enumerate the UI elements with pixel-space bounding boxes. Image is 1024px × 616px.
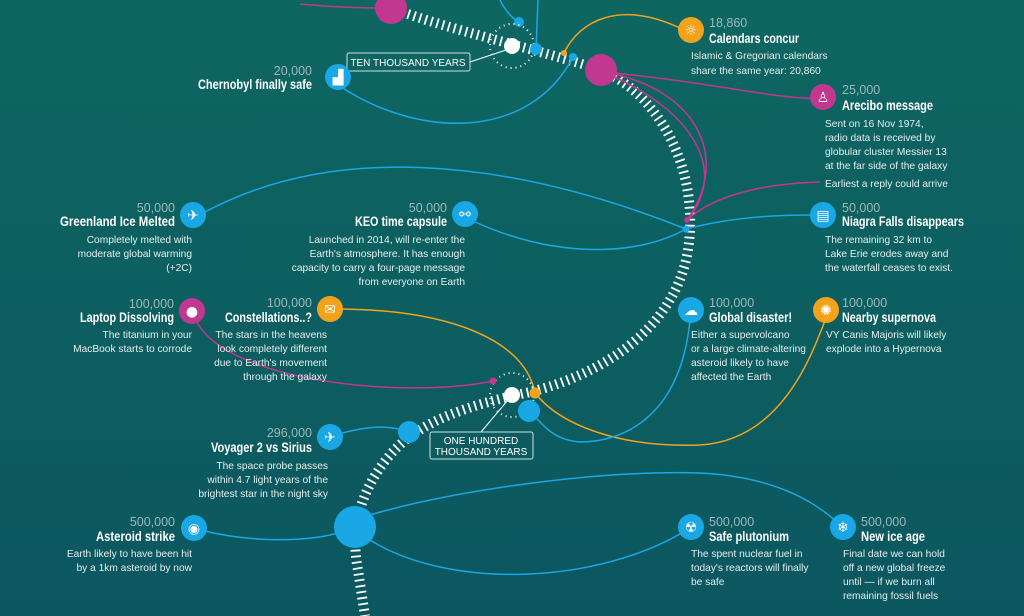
item: New ice age: until — if we burn all [843, 577, 935, 588]
item: Greenland: ✈ [187, 208, 199, 224]
item: Niagara: the waterfall ceases to exist. [825, 263, 953, 274]
item: Greenland [60, 201, 206, 274]
item: KEO: Earth's atmosphere. It has enough [310, 249, 465, 260]
item: Asteroid: 500,000 [130, 515, 175, 529]
item: Calendars concur: Islamic & Gregorian calendars [691, 51, 827, 62]
item: Laptop: ● [186, 304, 198, 320]
connector lines [195, 0, 842, 574]
item: KEO: Launched in 2014, will re-enter the [309, 235, 465, 246]
item: Safe plutonium: be safe [691, 577, 725, 588]
item: Arecibo: at the far side of the galaxy [825, 161, 948, 172]
item: Constellations: The stars in the heavens [215, 330, 327, 341]
item: Nearby supernova: VY Canis Majoris will likely [826, 330, 947, 341]
item: Global disaster [678, 296, 806, 383]
item: Greenland: Greenland Ice Melted [60, 213, 175, 229]
item: Arecibo: Earliest a reply could arrive [825, 179, 948, 190]
item: Arecibo: globular cluster Messier 13 [825, 147, 947, 158]
item: Greenland: (+2C) [166, 263, 192, 274]
item: Arecibo: radio data is received by [825, 133, 936, 144]
label: one hundred thousand years: THOUSAND YEARS [435, 447, 528, 458]
item: Calendars concur: 18,860 [709, 16, 747, 30]
item: Arecibo: Arecibo message [842, 97, 933, 113]
item: Laptop [73, 297, 205, 355]
item: Calendars concur: ☼ [685, 23, 697, 39]
item: KEO: 50,000 [409, 201, 447, 215]
item: KEO [292, 201, 478, 288]
item: Safe plutonium: today's reactors will finally [691, 563, 809, 574]
item: Arecibo: Sent on 16 Nov 1974, [825, 119, 924, 130]
item: Nearby supernova: ✺ [820, 303, 832, 319]
item: New ice age: 500,000 [861, 515, 906, 529]
item: Calendars concur: Calendars concur [709, 30, 799, 46]
item: Global disaster: asteroid likely to have [691, 358, 789, 369]
item: Constellations: through the galaxy [243, 372, 328, 383]
item: New ice age: New ice age [861, 528, 925, 544]
item: Safe plutonium: 500,000 [709, 515, 754, 529]
item: New ice age: ❄ [837, 520, 849, 536]
item: Constellations: 100,000 [267, 296, 312, 310]
item: Nearby supernova: 100,000 [842, 296, 887, 310]
item: Niagara [810, 201, 964, 274]
item: Asteroid: ◉ [188, 521, 200, 537]
label: ten thousand years: TEN THOUSAND YEARS [350, 58, 466, 69]
item: Voyager: within 4.7 light years of the [206, 475, 328, 486]
item: Voyager: Voyager 2 vs Sirius [211, 439, 312, 455]
item: Niagara: Niagra Falls disappears [842, 213, 964, 229]
label: one hundred thousand years: ONE HUNDRED [444, 436, 518, 447]
item: Arecibo [810, 83, 948, 190]
item: Calendars concur: share the same year: 20,860 [691, 66, 821, 77]
item: Safe plutonium: Safe plutonium [709, 528, 789, 544]
item: Asteroid [67, 515, 207, 574]
item: Greenland: moderate global warming [78, 249, 192, 260]
item: Global disaster: 100,000 [709, 296, 754, 310]
item: Laptop: 100,000 [129, 297, 174, 311]
item: Laptop: The titanium in your [103, 330, 193, 341]
item: Constellations: Constellations..? [225, 309, 312, 325]
item: Calendars concur [678, 16, 827, 77]
item: Arecibo: ♙ [817, 90, 829, 106]
item: Voyager: brightest star in the night sky [198, 489, 329, 500]
item: Constellations: ✉ [324, 302, 336, 318]
item: Greenland: 50,000 [137, 201, 175, 215]
item: Niagara: 50,000 [842, 201, 880, 215]
item: New ice age: Final date we can hold [843, 549, 945, 560]
label: one hundred thousand years [430, 400, 533, 459]
item: Greenland: Completely melted with [87, 235, 192, 246]
item: Voyager: 296,000 [267, 426, 312, 440]
item: Voyager: ✈ [324, 430, 336, 446]
item: Voyager [198, 424, 343, 500]
item: Global disaster: Either a supervolcano [691, 330, 790, 341]
item: New ice age: off a new global freeze [843, 563, 946, 574]
item: Chernobyl: 20,000 [274, 64, 312, 78]
item: Laptop: MacBook starts to corrode [73, 344, 192, 355]
item: KEO: from everyone on Earth [359, 277, 465, 288]
item: Global disaster: ☁ [684, 303, 698, 319]
timeline spine [355, 8, 690, 616]
item: Safe plutonium [678, 514, 809, 588]
item: Chernobyl: Chernobyl finally safe [198, 76, 312, 92]
item: Chernobyl [198, 64, 351, 92]
item: Asteroid: Earth likely to have been hit [67, 549, 192, 560]
item: Global disaster: affected the Earth [691, 372, 771, 383]
item: KEO: capacity to carry a four-page message [292, 263, 465, 274]
item: New ice age: remaining fossil fuels [843, 591, 938, 602]
item: Safe plutonium: The spent nuclear fuel in [691, 549, 803, 560]
item: Nearby supernova [813, 296, 947, 355]
item: Nearby supernova: Nearby supernova [842, 309, 936, 325]
item: Niagara: Lake Erie erodes away and [825, 249, 949, 260]
item: Asteroid: by a 1km asteroid by now [76, 563, 193, 574]
item: Constellations: due to Earth's movement [214, 358, 327, 369]
label: ten thousand years [347, 50, 506, 71]
item: Niagara: The remaining 32 km to [825, 235, 932, 246]
item: Constellations [214, 296, 343, 383]
item: Safe plutonium: ☢ [685, 520, 697, 536]
item: Voyager: The space probe passes [216, 461, 328, 472]
item: Asteroid: Asteroid strike [96, 528, 175, 544]
item: New ice age [830, 514, 946, 602]
item: Laptop: Laptop Dissolving [80, 309, 174, 325]
item: Global disaster: or a large climate-altering [691, 344, 806, 355]
item: Arecibo: 25,000 [842, 83, 880, 97]
item: Chernobyl: ▟ [332, 68, 344, 86]
item: Global disaster: Global disaster! [709, 309, 792, 325]
item: KEO: KEO time capsule [355, 213, 447, 229]
item: Nearby supernova: explode into a Hypernova [826, 344, 942, 355]
item: Niagara: ▤ [816, 208, 830, 224]
item: KEO: ⚯ [459, 207, 471, 223]
item: Constellations: look completely different [217, 344, 327, 355]
timeline nodes [334, 0, 690, 548]
